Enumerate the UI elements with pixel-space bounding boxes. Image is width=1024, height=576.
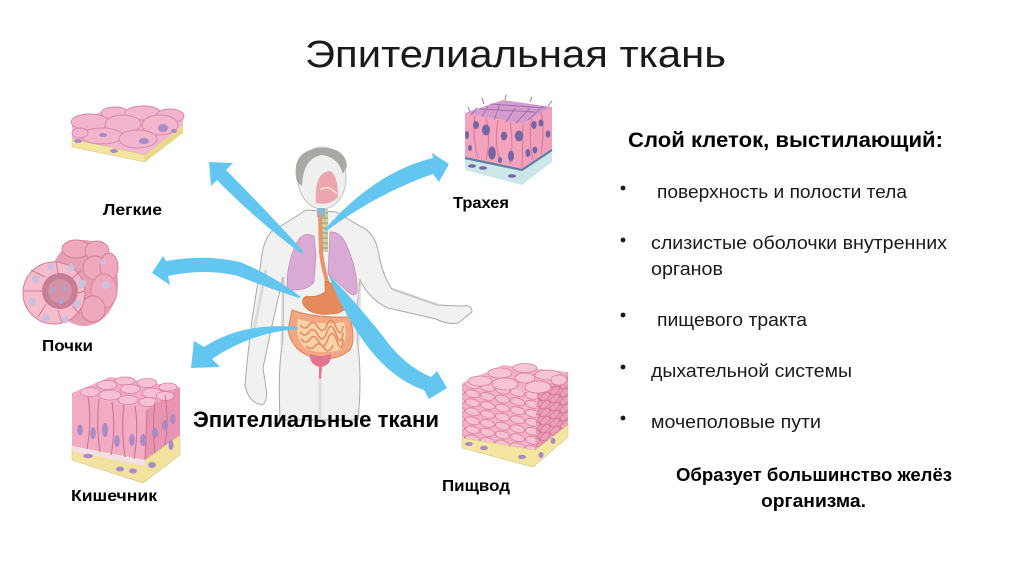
subheading: Слой клеток, выстилающий: — [628, 128, 943, 152]
tissue block: esophagus (stratified epithelium) — [462, 364, 568, 467]
large intestine — [288, 310, 353, 359]
caption: epithelial tissues: Эпителиальные ткани — [193, 407, 439, 432]
arrow to esophagus tissue — [328, 274, 447, 399]
tissue block: kidneys (tubule) — [23, 240, 118, 326]
title: Эпителиальная ткань — [305, 34, 726, 76]
bullet list: дыхательной системы — [651, 361, 852, 381]
arrow to intestine tissue — [191, 326, 298, 368]
label: esophagus: Пищвод — [442, 478, 510, 495]
throat and mouth cavity — [316, 171, 338, 204]
body shading and leg line — [254, 270, 438, 420]
arrow to trachea tissue — [325, 153, 449, 231]
head and hair — [298, 147, 346, 209]
bullet list: поверхность и полости тела — [657, 182, 908, 202]
tissue block: trachea (ciliated epithelium) — [465, 95, 552, 185]
body silhouette — [245, 210, 472, 420]
label: kidneys: Почки — [42, 338, 93, 355]
closing statement — [676, 465, 952, 511]
label: lungs: Легкие — [103, 202, 162, 219]
tissue block: lungs (squamous epithelium) — [71, 106, 184, 162]
bullet list: мочеполовые пути — [651, 412, 821, 432]
closing statement: Образует большинство желёз — [676, 465, 952, 485]
bullet list: органов — [651, 259, 723, 279]
lungs — [287, 234, 316, 290]
esophagus — [320, 215, 329, 287]
label: trachea: Трахея — [453, 195, 509, 212]
bladder — [310, 354, 331, 379]
arrow to lungs tissue — [209, 162, 303, 254]
bullet list: пищевого тракта — [657, 310, 808, 330]
bullet list: слизистые оболочки внутренних — [651, 233, 947, 253]
tissue block: intestine (columnar epithelium) — [72, 377, 180, 483]
trachea — [319, 208, 328, 252]
closing statement: организма. — [761, 491, 866, 511]
arrow to kidney tissue — [152, 256, 301, 298]
small intestine — [297, 319, 346, 352]
label: intestine: Кишечник — [71, 488, 157, 505]
human figure with organs — [245, 147, 472, 420]
text block: lining description — [621, 128, 947, 432]
bullet list — [621, 182, 947, 432]
stomach — [303, 281, 349, 314]
